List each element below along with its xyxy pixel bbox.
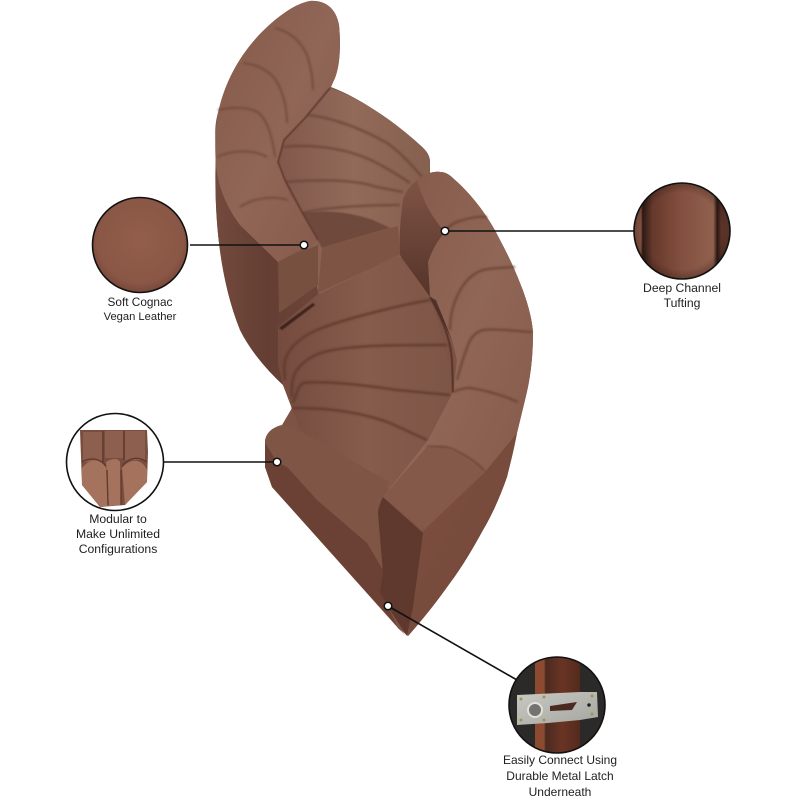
label: tufting: Deep Channel: [643, 281, 721, 295]
callout: modular configurations: Make Unlimited: [76, 527, 160, 541]
lower arm front dark face: [265, 443, 406, 636]
callout: deep channel tufting: [633, 183, 731, 310]
sofa illustration: [215, 1, 533, 636]
marker dots: [273, 227, 449, 610]
callout: soft cognac vegan leather: [92, 198, 188, 323]
dark wedge under cushion: [303, 212, 390, 248]
lower seat fan: [278, 255, 455, 490]
label: leather: Soft Cognac: [108, 295, 173, 309]
callout: metal latch: [503, 656, 617, 799]
right arm rolls: [383, 172, 533, 530]
sofa left outer side: [215, 150, 320, 385]
label: modular: Modular to: [89, 512, 147, 526]
callout: modular configurations: [66, 414, 164, 556]
leader lines: [163, 231, 634, 680]
label: latch: Easily Connect Using: [503, 753, 617, 767]
circle with mini chair: [66, 414, 164, 510]
callout: soft cognac vegan leather: Vegan Leather: [104, 311, 177, 323]
callout: deep channel tufting: Tufting: [664, 296, 700, 310]
callout: metal latch: Durable Metal Latch: [506, 769, 614, 783]
right arm inner dark face: [400, 180, 452, 340]
upper left back rolls: [215, 1, 340, 262]
callout: metal latch: Underneath: [529, 785, 591, 799]
front corner dark face: [378, 497, 423, 636]
circle with metal latch: [508, 656, 606, 754]
arm front top: [383, 447, 485, 531]
swatch circle: leather: [92, 198, 188, 292]
left arm front face: [278, 245, 318, 313]
lower left arm top: [265, 425, 390, 570]
right outer side panel: [408, 433, 517, 636]
swatch circle: tufting: [633, 183, 731, 279]
sofa base silhouette: [215, 1, 533, 636]
callout: modular configurations: Configurations: [79, 542, 157, 556]
upper seat fan: [275, 88, 430, 300]
